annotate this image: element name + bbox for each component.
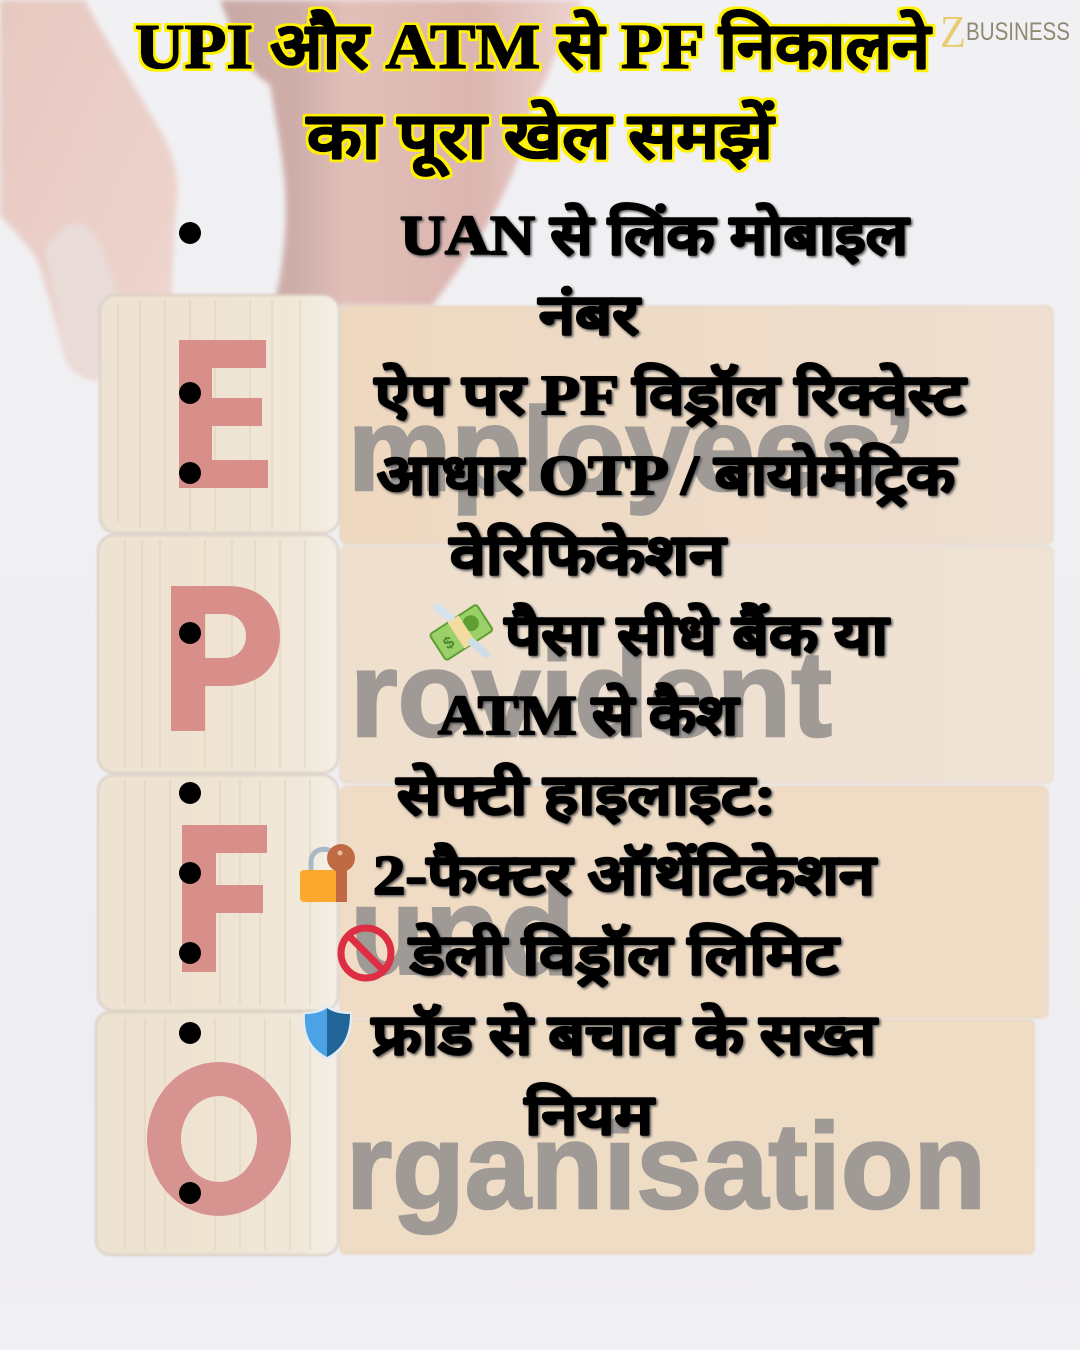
list item: fraud rules: नियम	[524, 1082, 656, 1147]
icon: prohibited	[341, 928, 391, 978]
icon: shield	[303, 1005, 352, 1060]
list item: daily limit: डेली विड्रॉल लिमिट	[408, 922, 840, 987]
photo: right block row 2	[340, 546, 1053, 783]
photo: right fingers	[220, 0, 582, 306]
list item: money to bank: पैसा सीधे बैंक या	[504, 602, 891, 667]
photo: right block row 3	[340, 786, 1048, 1018]
list item: UAN mobile	[400, 202, 910, 347]
list item: safety highlight: सेफ्टी हाइलाइट:	[396, 762, 776, 827]
photo: right block row 1	[340, 306, 1053, 544]
word: rganisation: rganisation	[346, 1098, 986, 1234]
letter P	[171, 586, 280, 731]
list item: money to bank	[438, 602, 891, 747]
letter E	[179, 340, 268, 488]
list item: aadhaar verification: आधार OTP / बायोमेट्रिक	[377, 442, 957, 507]
list item: aadhaar verification: वेरिफिकेशन	[449, 522, 727, 587]
icon: lock and key	[300, 844, 355, 902]
cube O	[96, 1012, 338, 1255]
list item: aadhaar verification	[377, 442, 957, 587]
word: mployees: mployees’	[348, 384, 916, 516]
list item: UAN mobile: नंबर	[538, 285, 641, 347]
list item: UAN mobile: UAN से लिंक मोबाइल	[400, 202, 910, 267]
photo: right block row 4	[340, 1020, 1034, 1254]
photo: left hand thumb	[0, 0, 178, 380]
title	[135, 9, 933, 177]
list item: two factor: 2-फैक्टर ऑथेंटिकेशन	[373, 842, 877, 907]
logo: Z Business	[940, 6, 1070, 57]
title: UPI और ATM से PF निकालने	[135, 9, 933, 82]
list item: app request: ऐप पर PF विड्रॉल रिक्वेस्ट	[374, 362, 967, 427]
letter O	[164, 1079, 274, 1199]
list item: fraud rules: फ्रॉड से बचाव के सख्त	[371, 1002, 878, 1067]
word: rovident: rovident	[350, 626, 832, 762]
bullet dots	[179, 222, 201, 1204]
logo: Z Business: Z	[940, 6, 966, 57]
letter F	[182, 825, 267, 972]
list item: fraud rules	[371, 1002, 878, 1147]
cube P	[98, 535, 338, 773]
cube E	[100, 295, 339, 533]
word: und: und	[350, 863, 575, 1001]
list item: money to bank: ATM से कैश	[438, 682, 740, 747]
icon: money with wings	[429, 604, 493, 661]
cube F	[98, 775, 338, 1011]
icon: money with wings: $	[440, 632, 458, 654]
title: का पूरा खेल समझें	[306, 99, 776, 177]
